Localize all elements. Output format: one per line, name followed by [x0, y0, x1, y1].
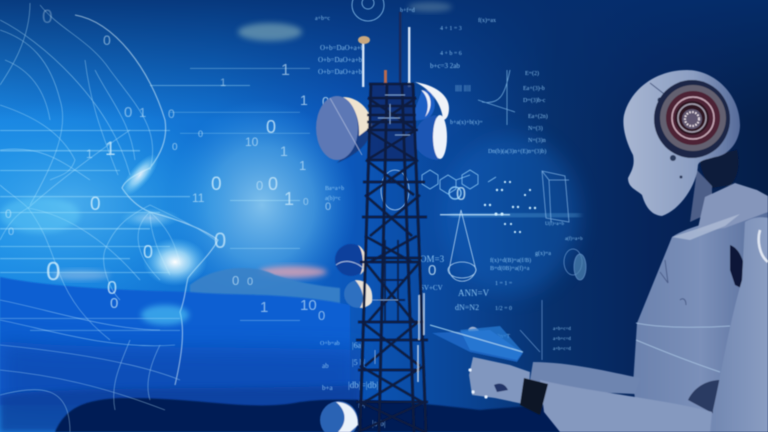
diagrams on holographic screen: [352, 0, 586, 360]
binary digits: 0: [8, 226, 14, 238]
binary digits: 0: [322, 94, 329, 109]
binary digits: 10: [300, 297, 317, 314]
binary digits: 1: [299, 158, 306, 173]
tower antenna rods: [358, 12, 410, 87]
formulas on holographic screen: |db|=|db|: [348, 380, 378, 390]
head outline: [75, 15, 218, 385]
binary digits: 0: [5, 207, 12, 221]
formulas on holographic screen: a+b=c: [315, 16, 330, 22]
binary digits: 0: [256, 178, 263, 193]
formulas on holographic screen: D=(3)b-c: [523, 97, 546, 104]
formulas on holographic screen: a(b)=c: [325, 195, 341, 202]
binary digits: 0: [103, 32, 111, 48]
robot upper arm: [712, 217, 768, 432]
formulas on holographic screen: [315, 7, 583, 428]
telecom tower: [316, 12, 449, 432]
light flares on face: [0, 149, 207, 325]
binary digits: 0: [247, 276, 253, 288]
dish: lower left dishes: [320, 244, 372, 432]
binary digits: 0: [456, 184, 466, 204]
formulas on holographic screen: a+b+c=d: [553, 327, 571, 332]
tower lattice: [356, 84, 428, 432]
binary digits: 0: [268, 174, 278, 194]
binary digits: 0: [172, 142, 178, 153]
formulas on holographic screen: O+b=DaO+a+b: [318, 56, 363, 64]
formulas on holographic screen: E=(2): [525, 70, 539, 77]
diagram: curve graph: [478, 70, 515, 125]
formulas on holographic screen: O+b=ab: [320, 341, 340, 347]
robot torso: [633, 183, 768, 432]
diagram: circle at top: [352, 0, 384, 21]
binary digits: 0: [90, 194, 101, 215]
formulas on holographic screen: f(x)+d(B)=a(f/B): [490, 257, 531, 264]
formulas on holographic screen: N=(3)n: [528, 137, 546, 144]
formulas on holographic screen: f(x)=ax: [478, 17, 496, 24]
formulas on holographic screen: |5 b|: [352, 358, 365, 367]
robot hand and wrist: [468, 327, 548, 415]
formulas on holographic screen: O+b=DaO+a+b: [320, 44, 365, 52]
binary digits: 0: [168, 107, 175, 121]
binary digits: 0: [214, 228, 226, 253]
formulas on holographic screen: SV+CV: [420, 284, 443, 292]
binary digits: 0: [198, 129, 203, 139]
binary digits: 0: [325, 201, 331, 213]
binary digits: 1: [220, 77, 226, 89]
tablet: [430, 325, 523, 362]
robot forearms: [530, 362, 712, 432]
formulas on holographic screen: b+c=3 2ab: [430, 62, 460, 70]
formulas on holographic screen: Ea+(2n): [528, 113, 548, 120]
binary digits: 1: [139, 105, 146, 120]
formulas on holographic screen: 4 + 1 = 3: [440, 26, 462, 32]
formulas on holographic screen: b+a(x)+b(x)=: [450, 119, 483, 126]
binary digits: 1: [300, 92, 308, 108]
formulas on holographic screen: a+b+c=d: [553, 347, 571, 352]
binary digits: 0: [124, 104, 132, 121]
robot eye disk: [654, 80, 730, 158]
binary digits: 0: [232, 273, 239, 288]
robot head: [623, 70, 740, 216]
diagram: molecule hexagons: [422, 170, 496, 199]
binary digits: 1: [284, 189, 294, 209]
robot: [430, 70, 768, 432]
formulas on holographic screen: Dn(b)(a(3)n+(E)n=(3)b): [488, 148, 546, 155]
formulas on holographic screen: a+b+c=d: [553, 337, 571, 342]
binary digits: 1: [105, 139, 116, 160]
illustration: wireframe human face profile: [0, 3, 218, 432]
binary digits: 0: [42, 7, 53, 28]
binary digits: 1: [281, 62, 290, 79]
formulas on holographic screen: 1 = 1 =: [495, 281, 513, 287]
diagram: large orbit on tower: [381, 170, 409, 210]
robot neck: [690, 150, 738, 222]
binary digits: 10: [245, 135, 259, 149]
data streaks: [0, 68, 580, 331]
dishes: right upper dishes: [412, 82, 449, 160]
diagram: cone: [448, 210, 476, 281]
diagram: overlapping circles: [564, 249, 586, 280]
binary digits: 0: [266, 117, 276, 137]
formulas on holographic screen: U(f)=a+b: [545, 222, 564, 227]
formulas on holographic screen: b+a: [322, 384, 333, 392]
formulas on holographic screen: Ea+(3)-b: [523, 85, 545, 92]
formulas on holographic screen: b+f=d: [400, 7, 415, 14]
dish: large left dish: [316, 96, 372, 163]
formulas on holographic screen: a(f)=a+b: [565, 237, 583, 242]
binary digits: 1: [86, 147, 93, 161]
formulas on holographic screen: OM=3: [420, 254, 445, 264]
binary digits: 0: [303, 197, 309, 208]
formulas on holographic screen: ab: [322, 362, 329, 370]
formulas on holographic screen: Ba=a+b: [325, 186, 344, 192]
binary digits: 0: [211, 174, 222, 195]
formulas on holographic screen: B=d(0B)=a(f)+a: [490, 265, 530, 272]
binary digits: 11: [192, 191, 205, 205]
formulas on holographic screen: N=(3): [528, 125, 543, 132]
bright dot molecule: [484, 181, 536, 233]
binary digits: [5, 7, 466, 323]
formulas on holographic screen: g(x)=a: [535, 250, 551, 257]
diagram: cuboid: [542, 171, 569, 222]
tower light details: [372, 95, 424, 382]
binary digits: 1: [260, 299, 268, 316]
formulas on holographic screen: 2n=T: [497, 334, 510, 340]
formulas on holographic screen: dN=N2: [455, 303, 479, 312]
formulas on holographic screen: O+b=DaO+a+b: [318, 68, 363, 76]
formulas on holographic screen: |d|: [358, 399, 365, 408]
formulas on holographic screen: ||||| |||||: [455, 84, 471, 92]
formulas on holographic screen: |6a|: [352, 341, 363, 350]
formulas on holographic screen: ANN=V: [458, 288, 490, 298]
binary digits: 0: [46, 256, 60, 286]
binary digits: 0: [428, 262, 436, 279]
diagram: straight lines: [520, 300, 542, 360]
binary digits: 1: [280, 143, 288, 159]
binary digits: 0: [107, 278, 117, 298]
binary digits: 0: [143, 242, 153, 262]
binary digits: 0: [110, 295, 118, 312]
binary digits: 0: [318, 308, 325, 323]
formulas on holographic screen: 4 + b = 6: [440, 51, 462, 57]
formulas on holographic screen: 1/2 = 0: [495, 306, 512, 312]
formulas on holographic screen: |a-b|: [372, 419, 385, 428]
